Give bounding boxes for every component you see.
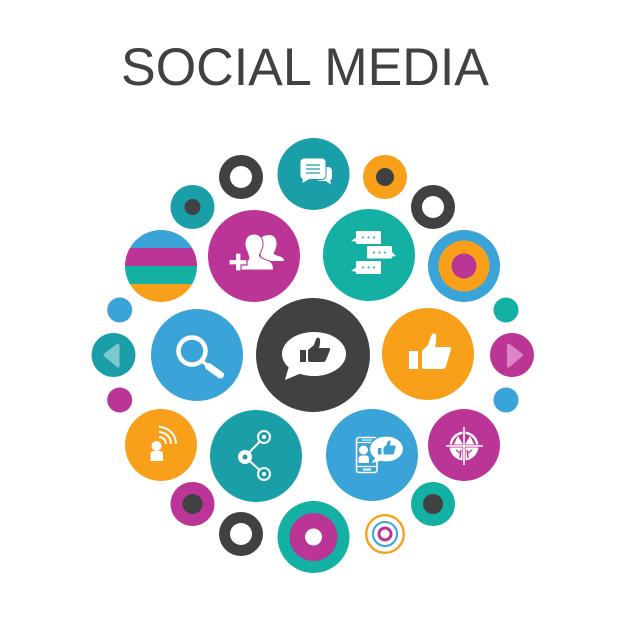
- circle: search icon: [151, 309, 243, 401]
- small dot: magenta left: [107, 388, 132, 412]
- circle: add friends icon: [208, 210, 300, 302]
- title: SOCIAL MEDIA: [121, 38, 490, 97]
- concentric circle: target: [428, 230, 500, 302]
- circle: top chat icon: [278, 138, 350, 210]
- circle: crosshair icon: [428, 409, 500, 481]
- decorative dot: teal top left: [170, 185, 214, 229]
- concentric circle: bottom centre: [278, 501, 350, 573]
- decorative ring: top right: [411, 185, 455, 229]
- small dot: teal right: [494, 298, 518, 322]
- small dot: blue left: [107, 298, 132, 322]
- decorative dot: magenta bottom left: [170, 482, 214, 526]
- circle: thumbs up icon: [382, 308, 474, 400]
- right arrow button: [490, 333, 534, 377]
- circle: phone with like bubble icon: [326, 409, 418, 501]
- circle: share icon: [210, 410, 302, 502]
- central circle: like speech bubble: [256, 298, 370, 412]
- circle: broadcasting person icon: [125, 409, 197, 481]
- small dot: blue right: [494, 388, 518, 412]
- decorative dot: orange top right: [363, 155, 407, 199]
- concentric rings: bottom right target: [366, 515, 404, 553]
- striped circle: [125, 230, 197, 302]
- decorative ring: bottom left: [219, 512, 263, 556]
- circle: conversation bubbles icon: [323, 209, 415, 301]
- left arrow button: [92, 333, 136, 377]
- decorative dot: teal bottom right: [411, 482, 455, 526]
- decorative ring: top left: [219, 155, 263, 199]
